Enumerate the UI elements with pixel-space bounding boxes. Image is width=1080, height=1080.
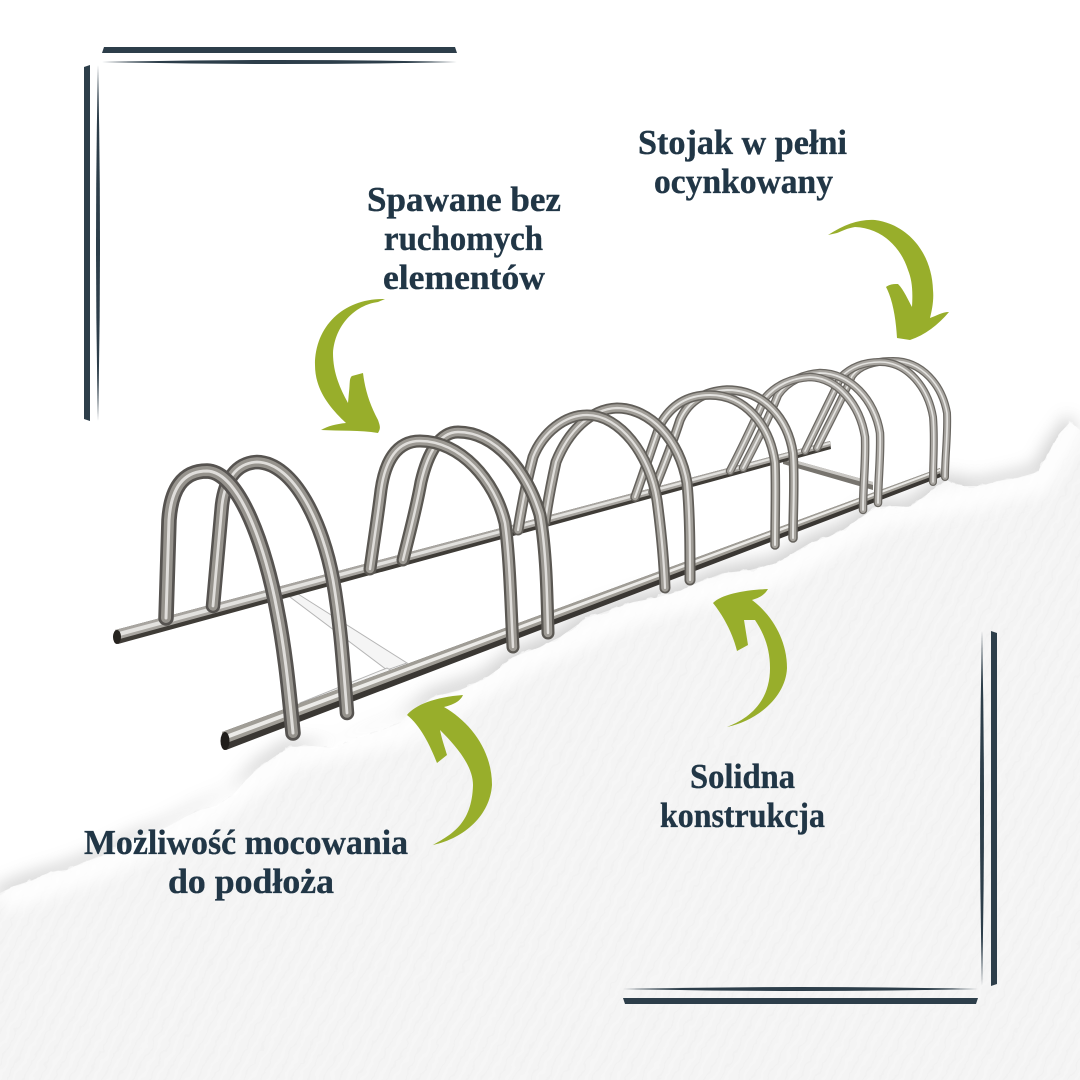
bicycle rack bbox=[113, 361, 947, 750]
label: fully galvanized: ocynkowany bbox=[654, 162, 833, 201]
label: welded without moving parts bbox=[367, 180, 561, 297]
label: solid construction: konstrukcja bbox=[660, 796, 825, 835]
label: welded without moving parts: elementów bbox=[383, 258, 546, 297]
arrow: to solid construction bbox=[713, 589, 787, 727]
rear rail bbox=[113, 441, 831, 644]
label: floor mounting: do podłoża bbox=[168, 862, 334, 901]
label: welded without moving parts: Spawane bez bbox=[367, 180, 561, 219]
label: solid construction: Solidna bbox=[690, 757, 795, 796]
arrow: to galvanized top bbox=[828, 220, 949, 340]
corner frame: top left bbox=[84, 47, 457, 421]
label: fully galvanized: Stojak w pełni bbox=[638, 123, 847, 162]
hoops, second pair bbox=[370, 432, 548, 647]
label: welded without moving parts: ruchomych bbox=[384, 219, 543, 258]
hoops, nearest pair bbox=[166, 462, 347, 733]
label: floor mounting bbox=[84, 823, 408, 901]
hoops, fourth pair bbox=[635, 390, 794, 545]
panel: torn paper background bbox=[0, 415, 1080, 1080]
label: floor mounting: Możliwość mocowania bbox=[84, 823, 408, 862]
mounting plate bbox=[290, 594, 407, 708]
far crossbar bbox=[783, 457, 873, 490]
label: solid construction bbox=[660, 757, 825, 835]
arrow: to welded hoops bbox=[315, 299, 385, 433]
front rail bbox=[220, 468, 941, 750]
arrow: to floor mounting bbox=[407, 695, 492, 845]
label: fully galvanized bbox=[638, 123, 847, 201]
hoops, far pair bbox=[805, 361, 947, 482]
corner frame: bottom right bbox=[623, 631, 997, 1004]
hoops, third pair bbox=[518, 408, 690, 588]
hoops, fifth pair bbox=[730, 373, 880, 510]
